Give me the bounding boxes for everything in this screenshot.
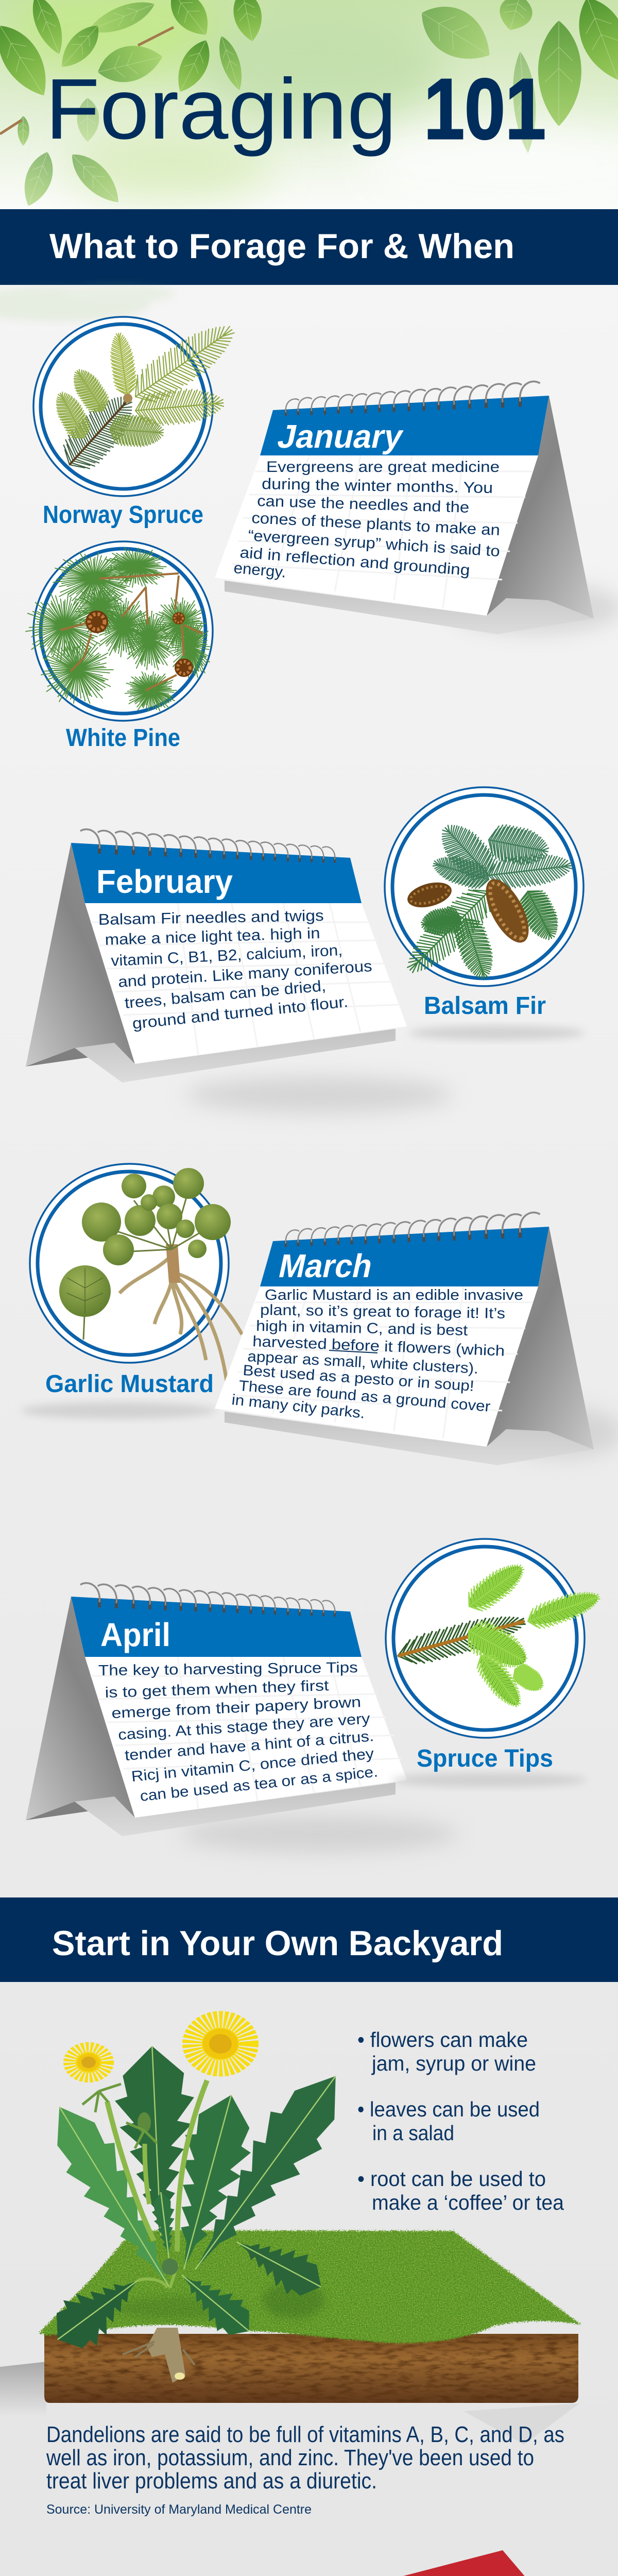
calendar: March: These are found as a ground cover xyxy=(238,1378,491,1415)
calendar: March: plant, so it’s great to forage it! It’s xyxy=(260,1302,505,1322)
label: Norway Spruce: Norway Spruce xyxy=(43,501,203,529)
calendar shadow: March xyxy=(500,1406,618,1458)
calendar: April: casing. At this stage they are very xyxy=(117,1710,371,1743)
circle: Spruce Tips xyxy=(386,1539,603,1738)
source: Source: University of Maryland Medical Centre xyxy=(46,2502,312,2517)
calendar: January: “evergreen syrup” which is said to xyxy=(248,527,501,560)
bullet list: dandelion uses: in a salad xyxy=(372,2121,454,2145)
circle: White Pine xyxy=(26,541,213,721)
calendar: March: Best used as a pesto or in soup! xyxy=(243,1362,475,1395)
calendar: April: can be used as tea or as a spice. xyxy=(139,1764,379,1805)
label: White Pine: White Pine xyxy=(66,724,180,752)
section band: Start in Your Own Backyard: Start in Your Own Backyard xyxy=(52,1924,503,1963)
calendar: April: tender and have a hint of a citrus. xyxy=(124,1728,374,1764)
label: Balsam Fir: Balsam Fir xyxy=(424,992,546,1020)
soil block shadow wedges xyxy=(0,2362,579,2445)
calendar: February: February xyxy=(96,863,233,900)
calendar: February: Balsam Fir needles and twigs xyxy=(98,907,324,928)
label: Garlic Mustard: Garlic Mustard xyxy=(45,1370,214,1398)
calendar: January: energy. xyxy=(233,560,287,581)
calendar: March: high in vitamin C, and is best xyxy=(256,1318,468,1339)
calendar shadow: January xyxy=(448,582,618,634)
calendar: March: Garlic Mustard is an edible invasive xyxy=(265,1287,523,1303)
bullet list: dandelion uses: • flowers can make xyxy=(357,2028,528,2052)
calendar: February: and protein. Like many coniferous xyxy=(117,958,372,991)
calendar: March xyxy=(215,1212,594,1465)
calendar: January xyxy=(215,381,594,634)
calendar: April xyxy=(26,1583,407,1836)
calendar: January: cones of these plants to make an xyxy=(251,510,501,539)
calendar: January: during the winter months. You xyxy=(262,476,493,497)
calendar: April: April xyxy=(100,1616,170,1653)
calendar: March: in many city parks. xyxy=(231,1392,366,1422)
header photo: leaves xyxy=(0,0,618,211)
clipboard xyxy=(0,2550,618,2576)
calendar: March: appear as small, white clusters). xyxy=(247,1348,479,1377)
calendar: March: harvested before it flowers (which xyxy=(252,1333,505,1360)
section band: What to Forage For & When xyxy=(0,209,618,285)
circle: Norway Spruce xyxy=(33,314,243,496)
calendar: February: trees, balsam can be dried, xyxy=(124,977,327,1012)
calendar: April: Ricj in vitamin C, once dried they xyxy=(131,1745,375,1785)
calendar: January: can use the needles and the xyxy=(257,493,470,516)
calendar: April: emerge from their papery brown xyxy=(111,1694,362,1722)
calendar: January: aid in reflection and grounding xyxy=(239,544,471,579)
calendar: February: make a nice light tea. high in xyxy=(105,925,320,948)
calendar: February xyxy=(26,829,407,1082)
calendar: January: January xyxy=(274,418,406,455)
calendar: February: ground and turned into flour. xyxy=(131,993,349,1032)
calendar: April: is to get them when they first xyxy=(105,1677,329,1701)
label shadow: Balsam Fir xyxy=(409,1026,585,1040)
section band: What to Forage For & When: What to Forage For & When xyxy=(49,227,514,266)
faded leaf reflection under band xyxy=(0,284,175,321)
circle: Garlic Mustard xyxy=(30,1164,242,1381)
circle: Balsam Fir xyxy=(385,787,583,986)
calendar shadow: February xyxy=(185,1076,453,1113)
illustration: dandelion plant xyxy=(35,2020,362,2383)
bullet list: dandelion uses: make a ‘coffee’ or tea xyxy=(372,2191,564,2214)
paragraph: dandelion nutrition: well as iron, potassium, and zinc. They've been used to xyxy=(46,2445,534,2470)
calendar: February: vitamin C, B1, B2, calcium, iron, xyxy=(111,942,343,970)
paragraph: dandelion nutrition xyxy=(46,2422,564,2494)
bullet list: dandelion uses: • root can be used to xyxy=(357,2167,546,2191)
calendar shadow: April xyxy=(180,1816,458,1853)
bullet list: dandelion uses xyxy=(357,2028,564,2214)
paragraph: dandelion nutrition: treat liver problems and as a diuretic. xyxy=(46,2468,377,2494)
section band: Start in Your Own Backyard xyxy=(0,1897,618,1982)
label: Spruce Tips: Spruce Tips xyxy=(417,1745,553,1772)
bullet list: dandelion uses: jam, syrup or wine xyxy=(371,2052,536,2075)
title: 101 xyxy=(424,61,546,157)
calendar: January: Evergreens are great medicine xyxy=(266,459,500,476)
label shadow: Spruce Tips xyxy=(391,1773,587,1787)
title: Foraging xyxy=(45,61,397,157)
title xyxy=(45,61,546,157)
calendar: March: March xyxy=(276,1247,376,1284)
bullet list: dandelion uses: • leaves can be used xyxy=(357,2097,540,2121)
grass and soil block xyxy=(39,2230,581,2403)
label shadow: Garlic Mustard xyxy=(21,1402,216,1419)
calendar: April: The key to harvesting Spruce Tips xyxy=(98,1659,358,1679)
